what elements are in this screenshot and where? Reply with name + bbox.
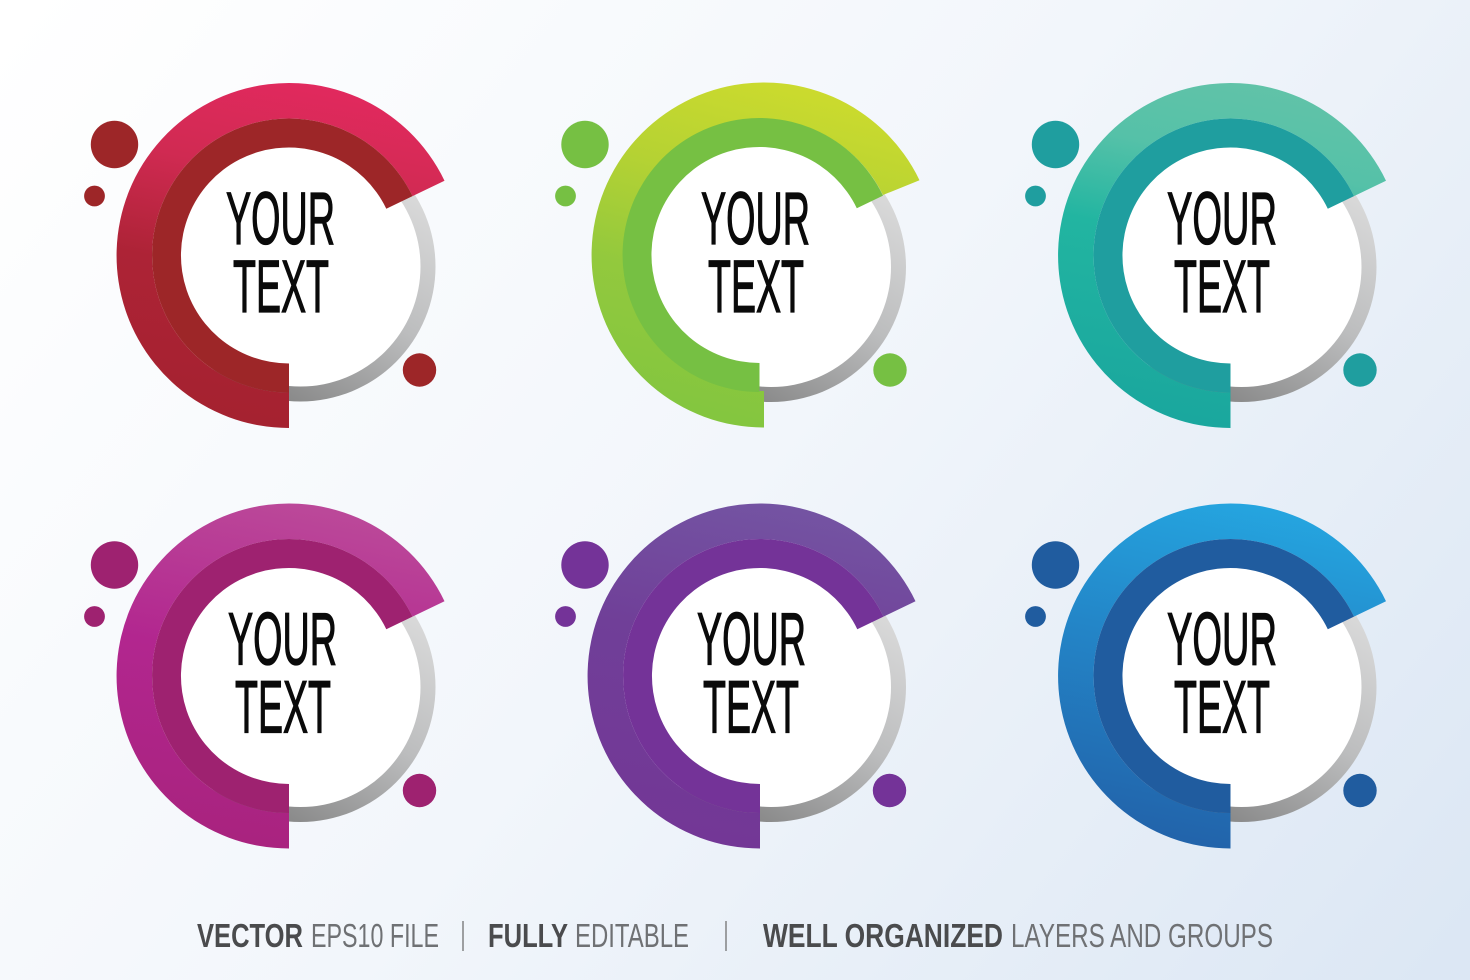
footer caption <box>197 917 1273 954</box>
inner arc <box>1094 539 1354 813</box>
decorative lower dot <box>403 353 436 387</box>
decorative small dot <box>555 606 576 627</box>
decorative lower dot <box>873 774 906 807</box>
decorative small dot <box>84 186 105 206</box>
decorative lower dot <box>1343 774 1377 807</box>
decorative large dot <box>561 121 609 168</box>
footer caption: WELL ORGANIZED <box>763 917 1003 954</box>
white text disc <box>1122 146 1362 387</box>
footer caption: EPS10 FILE <box>311 917 439 954</box>
panel: teal badge <box>1025 83 1386 428</box>
decorative lower dot <box>873 353 907 387</box>
badge text: TEXT <box>235 666 331 748</box>
outer arc <box>117 504 445 848</box>
white text disc <box>180 146 420 386</box>
gray backing ring <box>166 132 436 402</box>
badge text: TEXT <box>233 245 329 328</box>
panel: green badge <box>555 83 920 428</box>
badge text <box>1167 598 1277 748</box>
panel: red badge <box>84 83 445 428</box>
footer caption: EDITABLE <box>575 917 689 954</box>
badge text: TEXT <box>703 666 799 748</box>
badge text: YOUR <box>228 598 337 680</box>
decorative large dot <box>561 541 609 589</box>
white text disc <box>1122 567 1362 807</box>
decorative large dot <box>91 121 138 168</box>
badge text <box>1167 177 1277 328</box>
white text disc <box>650 146 891 387</box>
outer arc <box>588 504 916 848</box>
gray backing ring <box>636 552 906 822</box>
decorative small dot <box>555 186 576 206</box>
badge text: TEXT <box>1174 245 1270 328</box>
decorative small dot <box>1025 186 1046 206</box>
inner arc <box>623 539 884 813</box>
white text disc <box>651 567 891 807</box>
panel: purple badge <box>555 504 916 848</box>
gray backing ring <box>1106 132 1376 402</box>
panel: blue badge <box>1025 504 1386 848</box>
decorative lower dot <box>1343 353 1377 387</box>
panel: magenta badge <box>84 504 445 848</box>
inner arc <box>152 119 412 393</box>
badge text: YOUR <box>697 598 806 680</box>
badge text <box>228 598 337 748</box>
badge text <box>226 177 335 328</box>
decorative small dot <box>84 606 105 627</box>
footer caption: FULLY <box>488 917 568 954</box>
outer arc <box>117 83 445 428</box>
gray backing ring <box>1106 552 1376 822</box>
decorative large dot <box>1032 541 1079 589</box>
outer arc <box>1058 83 1386 428</box>
badge text <box>697 598 806 748</box>
footer caption: VECTOR <box>197 917 303 954</box>
gray backing ring <box>636 132 906 402</box>
decorative large dot <box>91 541 138 589</box>
badge text: TEXT <box>1174 666 1270 748</box>
badge text: YOUR <box>701 177 810 260</box>
inner arc <box>1094 119 1354 393</box>
inner arc <box>152 539 412 813</box>
decorative small dot <box>1025 606 1046 627</box>
badge text: YOUR <box>1167 177 1277 260</box>
decorative lower dot <box>403 774 436 807</box>
badge text: TEXT <box>708 245 804 328</box>
gray backing ring <box>166 552 436 822</box>
decorative large dot <box>1032 121 1079 168</box>
outer arc <box>592 83 920 428</box>
footer caption: LAYERS AND GROUPS <box>1011 917 1273 954</box>
outer arc <box>1058 504 1386 848</box>
badge text: YOUR <box>226 177 335 260</box>
badge text: YOUR <box>1167 598 1277 680</box>
badge text <box>701 177 810 328</box>
inner arc <box>623 118 883 392</box>
white text disc <box>180 567 420 807</box>
